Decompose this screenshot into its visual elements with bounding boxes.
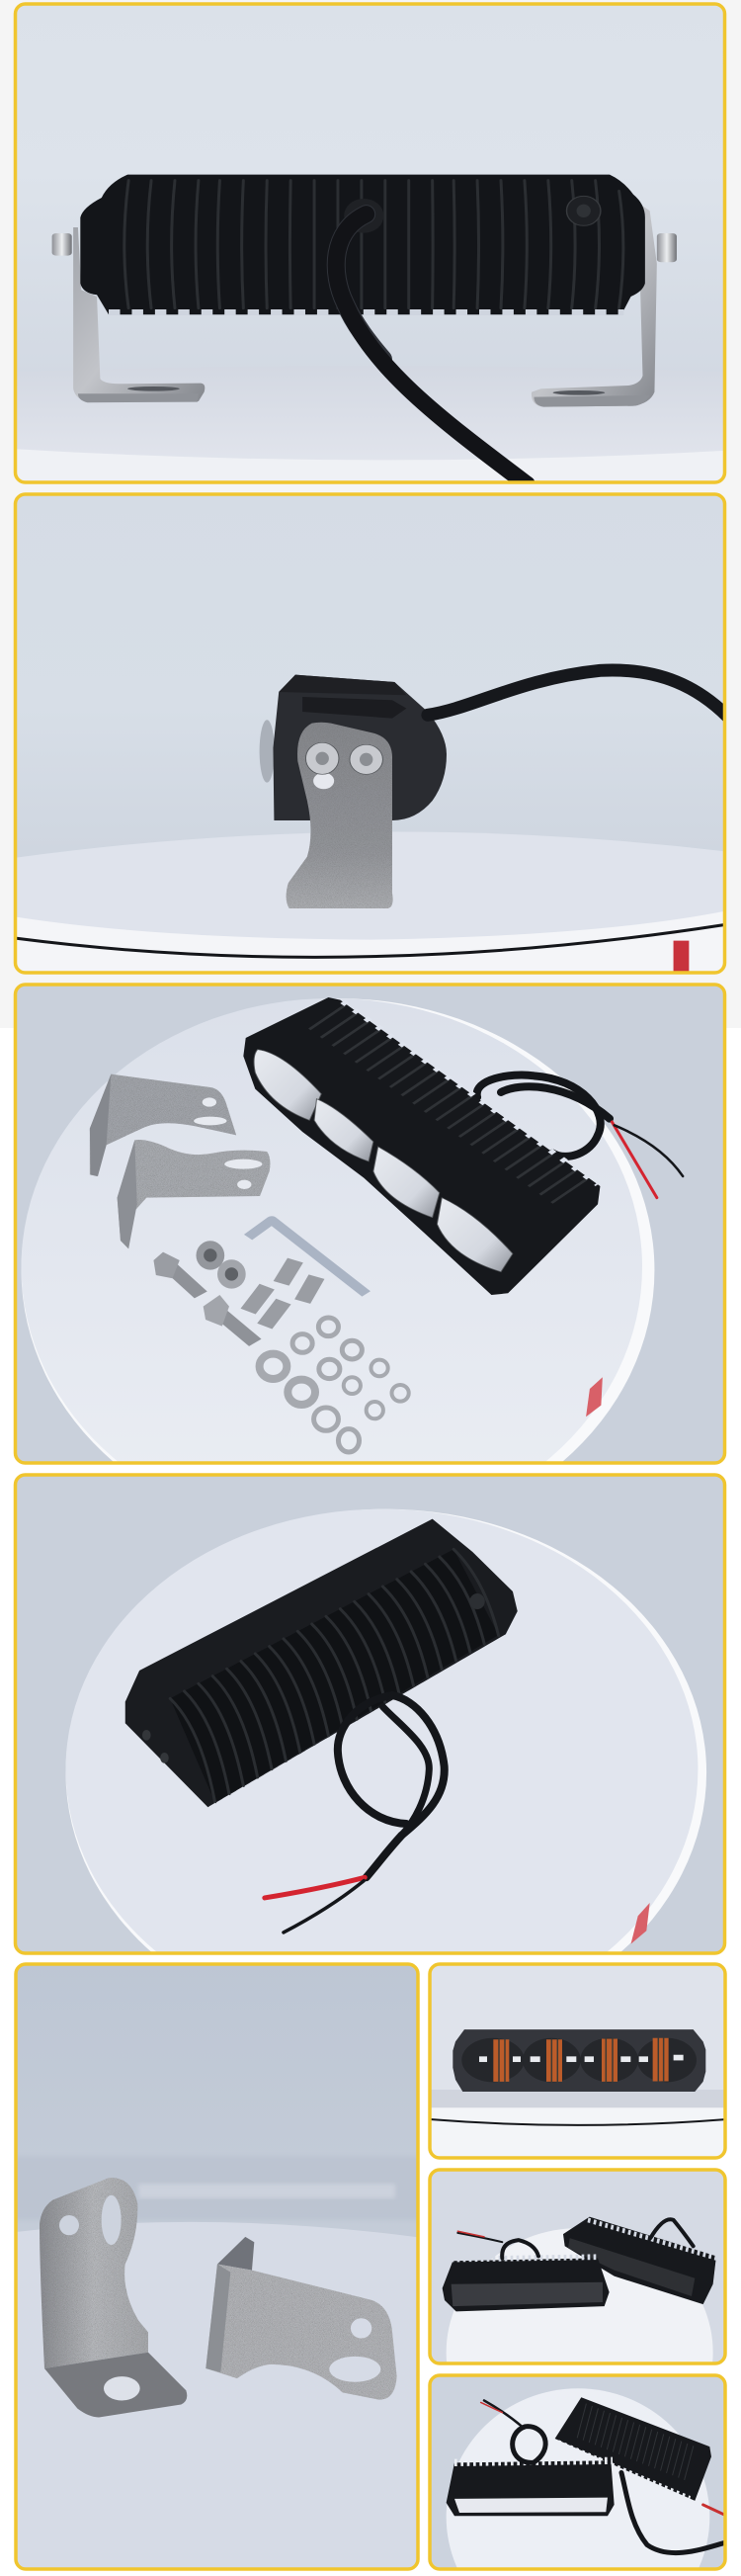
backdrop bbox=[0, 1947, 425, 2576]
border bbox=[16, 1475, 725, 1953]
border bbox=[16, 494, 725, 973]
panel: side view of light bar bbox=[0, 484, 741, 979]
lenses bbox=[461, 2038, 697, 2082]
red label tag bbox=[631, 1903, 650, 1944]
panel: two stainless brackets bbox=[0, 1947, 425, 2576]
left bracket bbox=[40, 2178, 187, 2417]
turntable disc bbox=[447, 2388, 709, 2576]
backdrop bbox=[420, 1947, 741, 2188]
cable loop and wires bbox=[477, 1074, 683, 1198]
right bracket bbox=[206, 2237, 397, 2400]
panel: rear angled view with cable bbox=[14, 1473, 727, 1955]
lens 3 bbox=[373, 1147, 440, 1218]
photo: brackets bbox=[0, 1947, 425, 2576]
large bolts bbox=[153, 1252, 255, 1342]
front light bbox=[443, 2231, 610, 2311]
border bbox=[430, 2170, 725, 2363]
border bbox=[16, 985, 725, 1463]
photo: rear angle bbox=[17, 1477, 723, 1951]
lens 4 bbox=[437, 1198, 513, 1272]
light bar body with fins bbox=[125, 1519, 518, 1810]
backdrop bbox=[17, 496, 723, 858]
black wire bbox=[284, 1881, 364, 1932]
washers bbox=[260, 1318, 409, 1452]
photo: pair front and back bbox=[420, 2372, 741, 2576]
backdrop bbox=[0, 1463, 741, 1957]
photo: pair facing forward bbox=[420, 2164, 741, 2477]
light body bbox=[260, 675, 447, 820]
LED highlights bbox=[479, 2055, 684, 2062]
turntable surface bbox=[0, 2222, 425, 2576]
power cable loop bbox=[338, 1695, 445, 1877]
turntable disc bbox=[17, 405, 723, 480]
front light bbox=[447, 2460, 615, 2516]
photo: rear view bbox=[0, 0, 741, 494]
panel: pair of lights front and back bbox=[420, 2372, 741, 2576]
photo: kit bbox=[17, 987, 723, 1461]
border bbox=[16, 4, 725, 482]
panel: pair of lights facing forward bbox=[420, 2164, 741, 2477]
mounting bracket bbox=[287, 723, 393, 908]
border bbox=[16, 1964, 418, 2569]
cables and wires bbox=[481, 2400, 724, 2553]
rear light bbox=[563, 2217, 716, 2304]
photo: front view bbox=[420, 1947, 741, 2188]
bolts bbox=[305, 742, 382, 774]
bracket A bbox=[90, 1074, 236, 1176]
rear light bbox=[555, 2397, 711, 2501]
sealing screw bbox=[566, 196, 601, 225]
panel: kit with light, brackets and hardware bbox=[14, 983, 727, 1465]
power cable bbox=[428, 670, 728, 717]
turntable disc bbox=[22, 998, 654, 1461]
nuts bbox=[196, 1241, 246, 1289]
amber reflectors bbox=[501, 2038, 661, 2082]
lens 2 bbox=[314, 1099, 373, 1161]
right mounting bracket bbox=[532, 206, 677, 407]
allen key bbox=[248, 1220, 367, 1294]
power cable bbox=[336, 199, 527, 484]
left mounting bracket bbox=[52, 227, 205, 402]
backdrop bbox=[420, 2164, 741, 2368]
lens 1 bbox=[254, 1050, 321, 1120]
backdrop bbox=[17, 6, 723, 372]
panel: front view with amber lenses bbox=[420, 1947, 741, 2188]
backdrop bbox=[420, 2372, 741, 2576]
photo: side view bbox=[0, 484, 741, 979]
bracket B bbox=[118, 1140, 270, 1248]
panel: rear view of light bar bbox=[0, 0, 741, 494]
backdrop bbox=[0, 974, 741, 1468]
light bar body with fins bbox=[80, 175, 645, 314]
red label tag bbox=[674, 941, 689, 974]
turntable band bbox=[420, 2090, 741, 2176]
turntable disc bbox=[65, 1508, 706, 1951]
small screws bbox=[248, 1260, 316, 1327]
reflector stripes bbox=[499, 2038, 664, 2082]
red wire bbox=[265, 1877, 365, 1898]
turntable disc bbox=[447, 2228, 713, 2477]
light housing bbox=[453, 2029, 705, 2092]
border bbox=[430, 1964, 725, 2158]
turntable disc bbox=[0, 832, 741, 979]
red label tag bbox=[586, 1377, 603, 1417]
light bar body with fins and lenses bbox=[243, 997, 600, 1295]
border bbox=[430, 2375, 725, 2569]
